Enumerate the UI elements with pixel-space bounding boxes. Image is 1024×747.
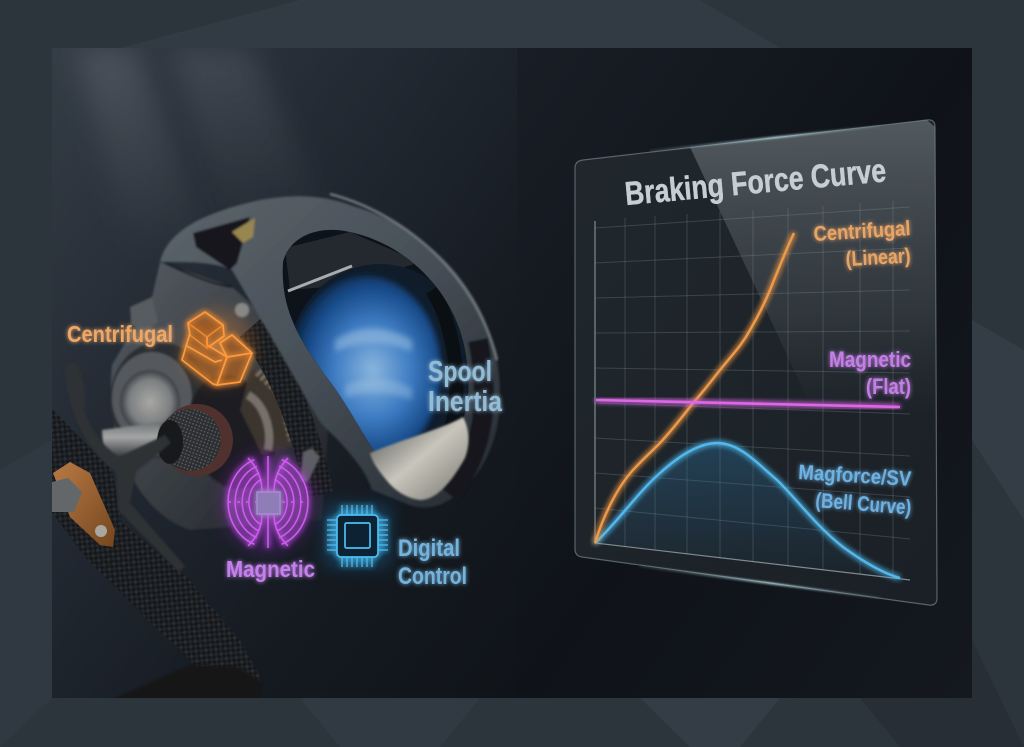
label: Digital Control bbox=[398, 535, 467, 590]
label: Magforce SV Bell Curve bbox=[798, 461, 912, 520]
shaft bbox=[100, 424, 160, 457]
copper plate and nut bbox=[52, 462, 115, 547]
chart title: Braking Force Curve bbox=[623, 151, 888, 212]
label: Digital Control: Digital bbox=[398, 535, 460, 562]
label: Spool Inertia: Spool bbox=[428, 356, 492, 388]
curve: magnetic flat bbox=[596, 400, 900, 407]
small lever bbox=[300, 448, 320, 482]
spool window bbox=[282, 230, 468, 452]
label: Centrifugal Linear: (Linear) bbox=[845, 245, 911, 271]
curve: centrifugal bbox=[595, 233, 794, 543]
label: Magnetic Flat: Magnetic bbox=[829, 347, 911, 372]
label: Magforce SV Bell Curve: Magforce/SV bbox=[798, 461, 912, 491]
knurled knob bbox=[157, 404, 233, 476]
curve: magforce bell bbox=[595, 443, 900, 578]
chart panel: glass sheet bbox=[575, 120, 937, 605]
label: Centrifugal: Centrifugal bbox=[67, 321, 173, 347]
label: Centrifugal Linear: Centrifugal bbox=[813, 217, 911, 246]
label: Magnetic: Magnetic bbox=[226, 556, 315, 582]
glass glare bbox=[690, 120, 936, 420]
icon: magnetic field bbox=[222, 452, 314, 552]
label: Magforce SV Bell Curve: (Bell Curve) bbox=[815, 489, 912, 520]
carbon plate bbox=[250, 328, 320, 495]
label: Magnetic Flat bbox=[829, 347, 911, 399]
reel frame bbox=[160, 194, 500, 508]
icon: centrifugal blocks bbox=[182, 310, 254, 386]
label: Spool Inertia bbox=[428, 356, 503, 418]
glowing panel edges bbox=[575, 126, 935, 598]
drag star bbox=[65, 363, 185, 572]
label: Digital Control: Control bbox=[398, 563, 467, 590]
baitcasting reel cutaway bbox=[50, 194, 503, 705]
thumb bar bbox=[370, 417, 469, 500]
chart axes bbox=[595, 221, 910, 580]
label: Spool Inertia: Inertia bbox=[428, 386, 503, 418]
spool glow bbox=[289, 276, 441, 464]
icon: digital chip bbox=[325, 505, 390, 567]
gears bbox=[240, 370, 296, 455]
hub bbox=[190, 376, 274, 488]
chart grid bbox=[595, 201, 910, 578]
handle arm bbox=[50, 407, 262, 705]
reel body and side plate bbox=[110, 262, 330, 530]
label: Centrifugal Linear bbox=[813, 217, 911, 271]
main panel bbox=[52, 48, 972, 698]
label: Magnetic Flat: (Flat) bbox=[866, 374, 911, 399]
